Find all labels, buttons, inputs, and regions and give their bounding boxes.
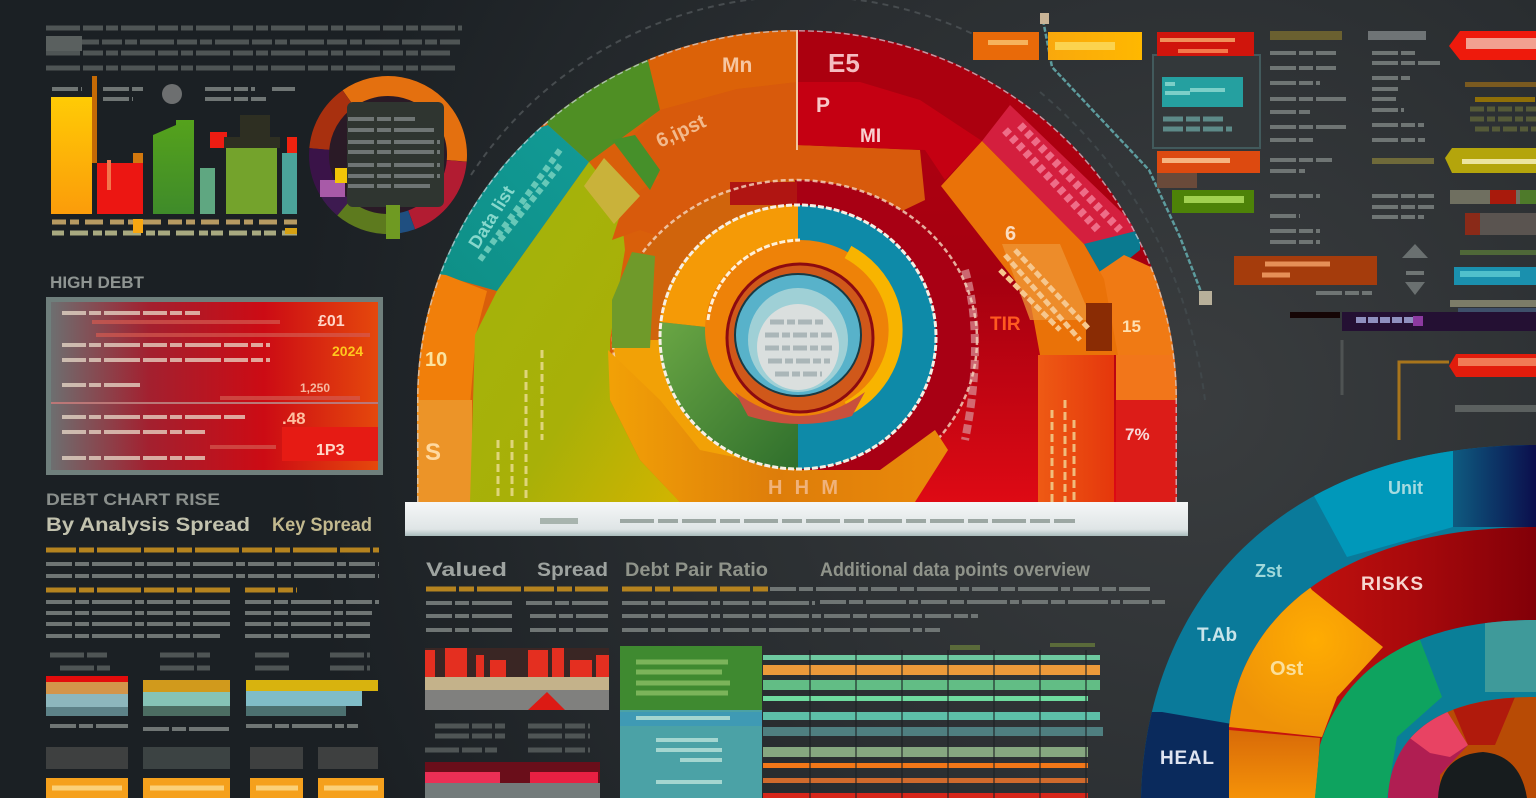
callout: red pill top right: [1449, 31, 1536, 60]
panel: teal: [620, 710, 762, 798]
bottom blocks: left: [46, 747, 384, 798]
ring B: teal orange green: [659, 205, 936, 469]
striped table: [763, 643, 1103, 798]
panel: right stacked card: [1153, 32, 1260, 213]
segment labels: 10: [425, 349, 447, 371]
card teal box: [1162, 77, 1243, 107]
segment labels: 6,ipst: [653, 110, 710, 153]
wheel labels: RISKS: [1361, 574, 1423, 595]
segment: green: [546, 60, 660, 190]
text block: middle lower: Valued: [426, 560, 507, 581]
value labels: 1,250: [300, 381, 330, 395]
base plate: [405, 502, 1188, 536]
center disc: [757, 304, 839, 390]
segment: top right dark red: [801, 30, 1008, 92]
text block: middle lower: [426, 560, 1165, 630]
panel: green: [620, 646, 762, 710]
segment labels: MI: [860, 126, 881, 147]
wheel labels: [1160, 478, 1423, 769]
text block: middle lower: Debt Pair Ratio: [625, 560, 768, 581]
ring A: outer inner-ring: [613, 180, 977, 500]
amber connector with red pill: [1399, 354, 1536, 440]
inner ring: [1388, 697, 1536, 798]
text block: lower left: [46, 490, 379, 636]
axis labels: [52, 219, 297, 234]
segment: far right orange: [1099, 255, 1180, 355]
value labels: [282, 313, 363, 459]
text block: middle lower: Spread: [537, 560, 608, 581]
callout: yellow pill: [1445, 148, 1536, 173]
wheel labels: Ost: [1270, 658, 1304, 680]
segment: orange diagonal band: [941, 141, 1118, 355]
lower orange ring: [608, 350, 948, 502]
callout: orange and yellow bars: [973, 32, 1142, 60]
segment: upper orange band: [612, 145, 925, 240]
outer edge: [417, 30, 1177, 502]
segment: small teal: [1084, 231, 1140, 272]
wheel labels: Unit: [1388, 478, 1423, 498]
light label bar: [1450, 300, 1536, 312]
segment labels: Mn: [722, 54, 752, 77]
section heading: HIGH DEBT: [50, 273, 145, 292]
segment: olive wedge: [470, 162, 680, 502]
text block: below histogram: [425, 726, 600, 798]
value labels: .48: [282, 409, 306, 428]
segment labels: [425, 48, 1150, 502]
segment: top orange: [642, 30, 794, 62]
card footer: [1157, 151, 1260, 173]
segment labels: E5: [828, 48, 860, 78]
segments: left orange: [417, 274, 487, 502]
segment: bright red band: [797, 82, 982, 180]
segment labels: S: [425, 439, 441, 466]
ring D: dark red: [727, 264, 873, 412]
segment labels: 15: [1122, 317, 1141, 336]
vertical guide lines: [1340, 340, 1344, 395]
text block: top right: [1465, 82, 1536, 129]
text block: lower left: By Analysis Spread: [46, 515, 250, 536]
cyan bar: [1454, 267, 1536, 285]
segment labels: Data list: [464, 182, 519, 252]
segment: pink strip: [982, 105, 1140, 245]
segment labels: TIR: [990, 314, 1021, 335]
text block: middle lower: Additional data points overview: [820, 560, 1090, 581]
main radial arch chart: [417, 30, 1177, 502]
segment labels: P: [816, 94, 830, 117]
segments: lower right boxes: [1038, 355, 1180, 502]
wheel center: [1438, 752, 1527, 798]
wheel labels: HEAL: [1160, 748, 1214, 769]
segment: dark bar: [1086, 303, 1112, 351]
faint outer arcs: [471, 0, 1205, 400]
segment: olive lozenge: [584, 158, 640, 224]
brown orange bar: [1234, 256, 1377, 285]
segment labels: 6: [1005, 223, 1016, 245]
segment labels: 7%: [1125, 425, 1150, 444]
ring C: orange: [705, 240, 896, 424]
text columns: right: [1270, 31, 1440, 295]
segment: teal: [430, 125, 589, 291]
green tag: [1172, 190, 1254, 213]
text block: lower left: Key Spread: [272, 515, 372, 536]
donut chart: [291, 58, 485, 252]
chart: red histogram: [425, 648, 609, 710]
header text block: top left: [46, 28, 462, 68]
wheel labels: Zst: [1255, 561, 1282, 581]
third ring: [1315, 610, 1536, 798]
value labels: £01: [318, 313, 345, 330]
mini charts row: [46, 655, 378, 729]
wheel chart: bottom right: [1141, 445, 1536, 798]
wheel labels: T.Ab: [1197, 625, 1237, 646]
second ring: [1229, 527, 1536, 798]
bar chart: [51, 76, 297, 234]
green side tab: [612, 252, 655, 348]
outer ring: [1141, 445, 1536, 798]
value labels: 1P3: [316, 442, 345, 459]
mixed legend rows: [1450, 190, 1536, 255]
text block: lower left: DEBT CHART RISE: [46, 490, 220, 509]
segment labels: HHM: [768, 477, 838, 499]
value labels: 2024: [332, 343, 363, 359]
purple bar: [1290, 312, 1536, 331]
connector line with nodes: [1040, 13, 1212, 305]
panel: red summary table: [46, 297, 383, 475]
ring E: teal: [735, 274, 861, 396]
card header: [1157, 32, 1254, 56]
bar chart labels: [52, 84, 295, 104]
